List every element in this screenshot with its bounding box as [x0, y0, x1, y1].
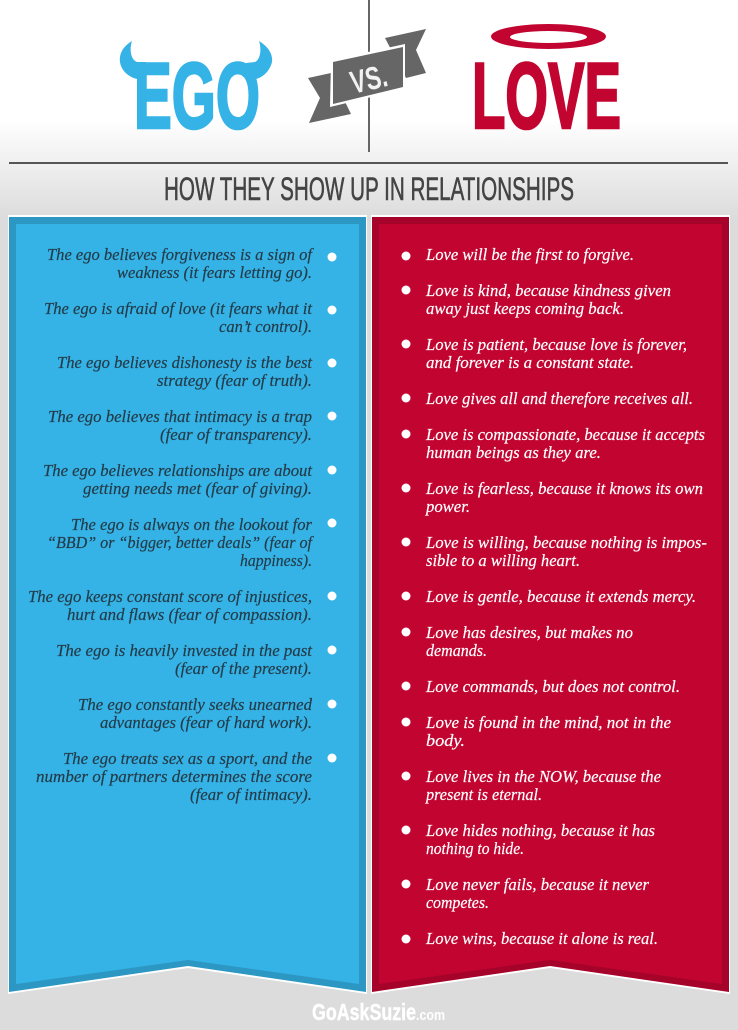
love item 11 — [402, 713, 671, 750]
love item 9 — [402, 623, 633, 660]
footer logo: .com — [416, 1007, 445, 1024]
ego item 6: happiness). — [240, 551, 312, 570]
ego item 2 — [44, 299, 336, 336]
panel: ego — [8, 215, 367, 994]
ego item 6 — [47, 515, 336, 570]
love item 9: demands. — [426, 641, 487, 660]
ego item 9: The ego constantly seeks unearned — [78, 695, 313, 714]
ego list — [28, 245, 336, 804]
ego item 4 — [48, 407, 336, 444]
ego item 4: (fear of transparency). — [160, 425, 312, 444]
vs ribbon banner — [308, 29, 426, 123]
love item 14: Love never fails, because it never — [425, 875, 650, 894]
love item 3: and forever is a constant state. — [426, 353, 634, 372]
love item 2: Love is kind, because kindness given — [425, 281, 671, 300]
ego item 1: weakness (it fears letting go). — [117, 263, 312, 282]
ego item 10 — [36, 749, 336, 804]
love item 7: Love is willing, because nothing is impos- — [425, 533, 707, 552]
love item 9: Love has desires, but makes no — [425, 623, 633, 642]
ego item 8: (fear of the present). — [175, 659, 312, 678]
title: LOVE with halo — [472, 24, 621, 148]
ego item 1 — [47, 245, 336, 282]
love item 6: power. — [425, 497, 470, 516]
ego item 9: advantages (fear of hard work). — [100, 713, 312, 732]
love item 3 — [402, 335, 687, 372]
love item 8: Love is gentle, because it extends mercy. — [425, 587, 696, 606]
ego item 2: can’t control). — [219, 317, 312, 336]
title: EGO with horns — [120, 41, 272, 148]
love item 6: Love is fearless, because it knows its own — [425, 479, 703, 498]
love item 11: body. — [426, 731, 465, 750]
love item 1: Love will be the first to forgive. — [425, 245, 634, 264]
icon: halo — [491, 24, 606, 49]
ego item 10: number of partners determines the score — [36, 767, 312, 786]
love item 3: Love is patient, because love is forever, — [425, 335, 687, 354]
love item 13: nothing to hide. — [426, 839, 524, 858]
love item 5 — [402, 425, 705, 462]
icon: devil horns — [120, 41, 272, 79]
panel: love — [371, 215, 730, 994]
ego item 5 — [43, 461, 336, 498]
love item 10: Love commands, but does not control. — [425, 677, 680, 696]
love item 4: Love gives all and therefore receives all. — [425, 389, 693, 408]
ego item 5: getting needs met (fear of giving). — [83, 479, 312, 498]
love item 12: present is eternal. — [425, 785, 542, 804]
ego item 8: The ego is heavily invested in the past — [56, 641, 312, 660]
title: LOVE with halo: LOVE — [472, 43, 621, 148]
love item 6 — [402, 479, 703, 516]
ego item 4: The ego believes that intimacy is a trap — [48, 407, 312, 426]
love item 7: sible to a willing heart. — [426, 551, 580, 570]
ego item 3 — [57, 353, 336, 390]
love item 14 — [402, 875, 650, 912]
love item 5: Love is compassionate, because it accepts — [425, 425, 705, 444]
title: EGO with horns: EGO — [134, 43, 260, 148]
love item 5: human beings as they are. — [426, 443, 601, 462]
ego item 6: “BBD” or “bigger, better deals” (fear of — [47, 533, 314, 552]
love item 12 — [402, 767, 661, 804]
ego item 2: The ego is afraid of love (it fears what it — [44, 299, 312, 318]
ego item 3: strategy (fear of truth). — [157, 371, 312, 390]
ego item 8 — [56, 641, 336, 678]
love item 7 — [402, 533, 707, 570]
love item 13: Love hides nothing, because it has — [425, 821, 655, 840]
ego item 5: The ego believes relationships are about — [43, 461, 312, 480]
love item 14: competes. — [426, 893, 489, 912]
love item 2: away just keeps coming back. — [426, 299, 624, 318]
ego item 6: The ego is always on the lookout for — [71, 515, 313, 534]
ego item 3: The ego believes dishonesty is the best — [57, 353, 312, 372]
footer logo: GoAskSuzie — [312, 999, 416, 1025]
vs ribbon banner: VS. — [347, 57, 391, 101]
ego item 10: The ego treats sex as a sport, and the — [63, 749, 312, 768]
ego item 9 — [78, 695, 336, 732]
love list — [402, 245, 707, 948]
love item 2 — [402, 281, 671, 318]
love item 11: Love is found in the mind, not in the — [425, 713, 671, 732]
ego item 7: hurt and flaws (fear of compassion). — [67, 605, 312, 624]
ego item 7 — [28, 587, 336, 624]
love item 13 — [402, 821, 655, 858]
ego item 7: The ego keeps constant score of injustices, — [28, 587, 312, 606]
love item 15: Love wins, because it alone is real. — [425, 929, 658, 948]
love item 12: Love lives in the NOW, because the — [425, 767, 661, 786]
ego item 10: (fear of intimacy). — [190, 785, 312, 804]
ego item 1: The ego believes forgiveness is a sign of — [47, 245, 314, 264]
